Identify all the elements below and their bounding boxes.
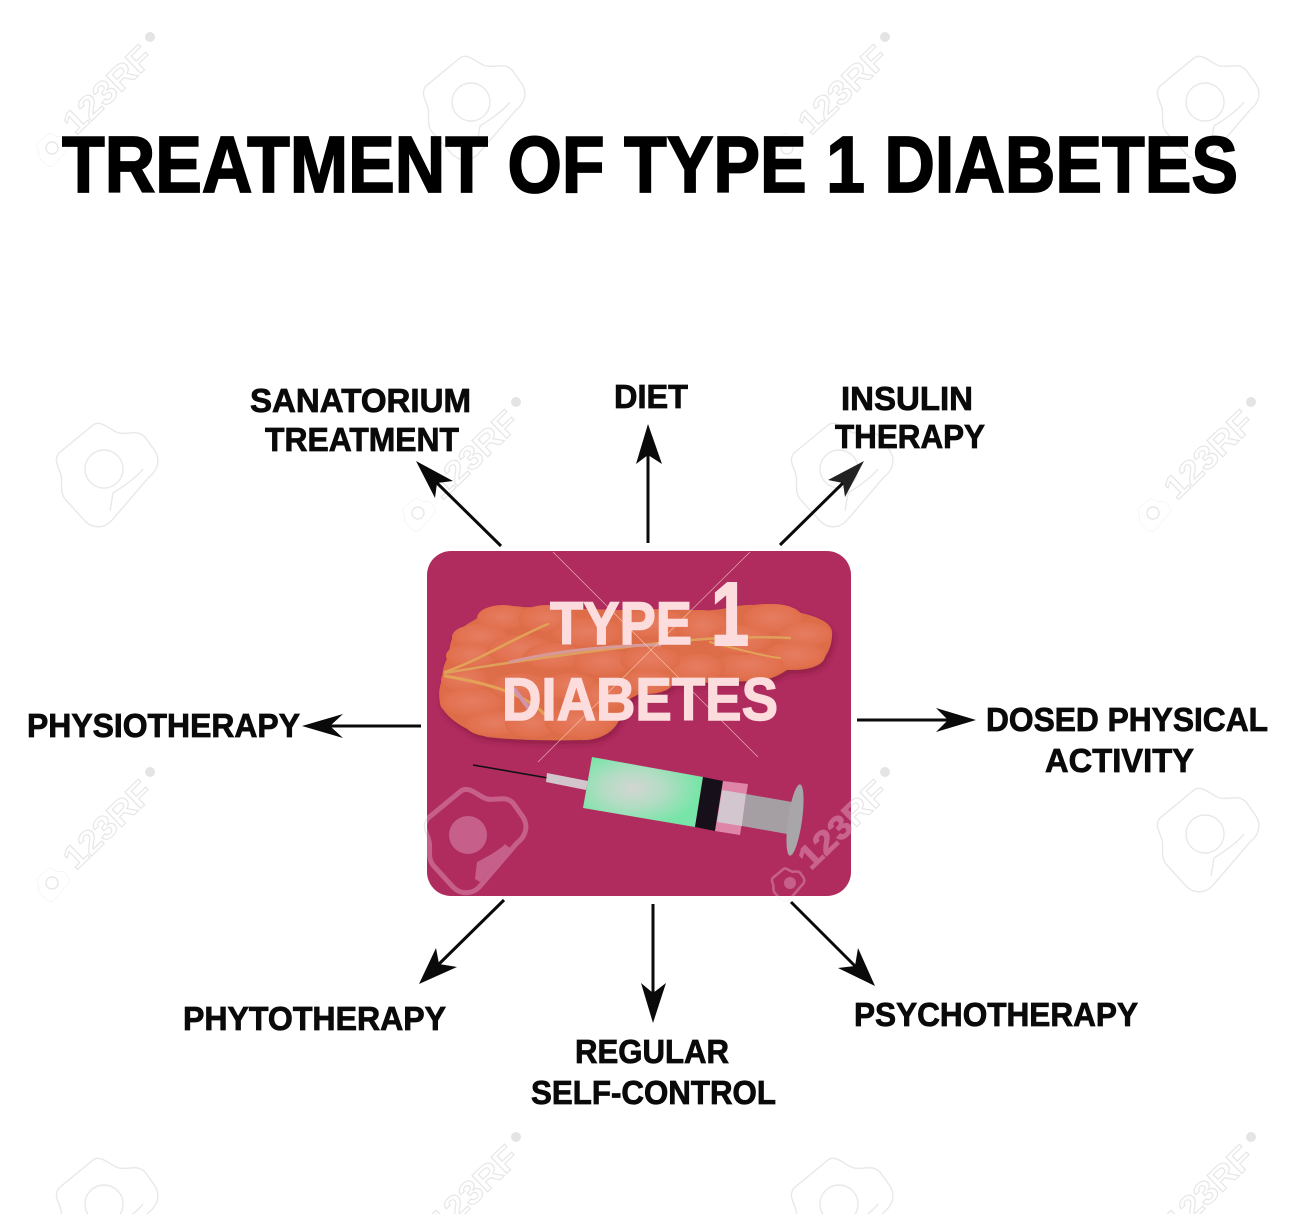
label: psychotherapy: PSYCHOTHERAPY (854, 997, 1138, 1034)
card label: type 1: 1 (711, 565, 749, 665)
label: physiotherapy: PHYSIOTHERAPY (27, 708, 300, 745)
arrow: to phytotherapy (419, 900, 504, 984)
card label: type 1 (550, 565, 749, 665)
label: regular self-control: REGULAR (575, 1034, 729, 1071)
label: dosed physical activity: DOSED PHYSICAL (986, 702, 1268, 739)
watermark pattern: 123RF (55, 38, 160, 141)
icon: syringe (473, 757, 807, 857)
pancreas ducts (445, 624, 790, 716)
label: insulin therapy: INSULIN (841, 381, 973, 418)
watermark on card (427, 786, 851, 896)
arrow: to diet (636, 424, 662, 543)
watermark pattern: 123RF (55, 773, 160, 876)
label: sanatorium treatment (250, 383, 471, 459)
label: dosed physical activity: ACTIVITY (1045, 743, 1194, 780)
watermark pattern: 123RF (421, 403, 526, 506)
watermark pattern: 123RF (1156, 403, 1261, 506)
label: insulin therapy (835, 381, 985, 456)
label: phytotherapy: PHYTOTHERAPY (183, 1001, 446, 1038)
arrow: to sanatorium treatment (416, 461, 501, 546)
label: dosed physical activity (986, 702, 1268, 780)
arrow: to regular self-control (641, 904, 666, 1023)
arrow: to physiotherapy (302, 714, 421, 738)
label: insulin therapy: THERAPY (835, 419, 985, 456)
label: regular self-control: SELF-CONTROL (531, 1075, 776, 1112)
arrow: to psychotherapy (791, 902, 875, 986)
watermark pattern: 123RF (790, 38, 895, 141)
thin crossing lines (538, 552, 758, 762)
card label: diabetes: DIABETES (502, 666, 778, 733)
watermark pattern: 123RF (790, 773, 895, 876)
card label: type 1: TYPE (550, 590, 692, 657)
label: regular self-control (531, 1034, 776, 1112)
label: sanatorium treatment: TREATMENT (265, 422, 460, 459)
card background (427, 551, 851, 896)
label: sanatorium treatment: SANATORIUM (250, 383, 471, 420)
panel: type 1 diabetes card (427, 551, 851, 896)
watermark on card: 123RF (790, 773, 895, 876)
icon: pancreas (439, 604, 832, 740)
arrow: to insulin therapy (780, 461, 864, 545)
label: diet: DIET (614, 379, 689, 416)
arrow: to dosed physical activity (857, 708, 976, 732)
